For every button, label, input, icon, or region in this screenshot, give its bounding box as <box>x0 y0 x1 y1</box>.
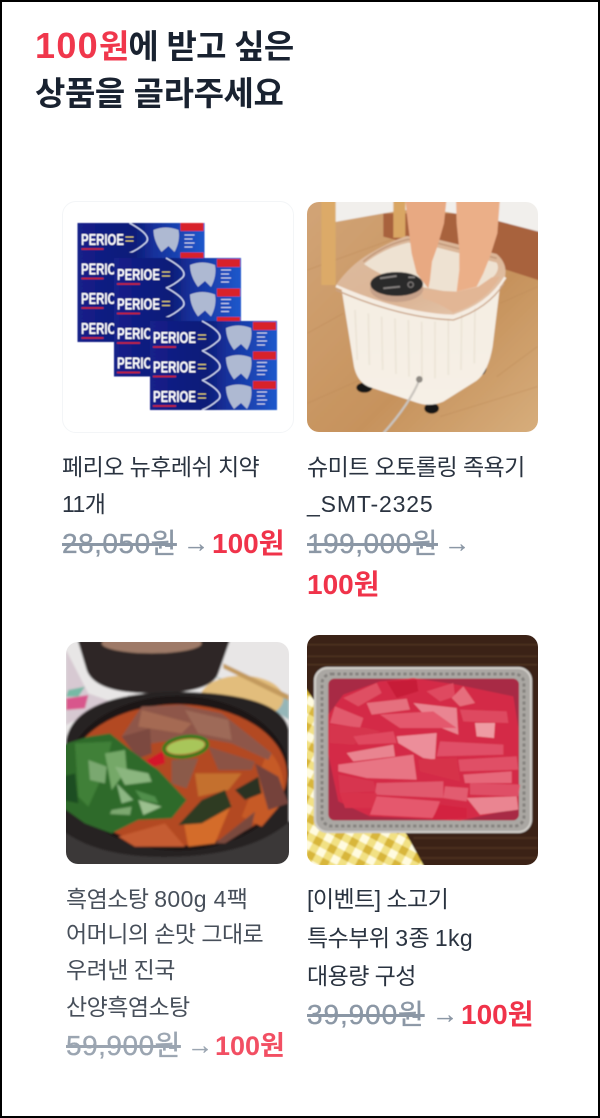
product image: Perioe toothpaste: PERIOE <box>153 360 196 376</box>
product image: Perioe toothpaste: PERIOE <box>117 267 160 284</box>
product image: Perioe toothpaste: PERIOE <box>81 321 124 338</box>
product name second line: 11개 <box>62 491 105 517</box>
price row: 59,900원 <box>66 1030 181 1061</box>
price row <box>66 1030 285 1061</box>
price row <box>307 999 533 1030</box>
product image: beef tray <box>307 635 538 865</box>
product name second line: _SMT-2325 <box>307 491 434 517</box>
product image: beef soup <box>66 642 289 864</box>
product name line 2: 특수부위 3종 1kg <box>307 925 473 951</box>
product image: Perioe toothpaste: PERIOE <box>117 296 160 314</box>
price row: 100원 <box>461 999 533 1030</box>
product name line 4: 산양흑염소탕 <box>66 994 190 1020</box>
old price and arrow: 199,000원 <box>307 528 438 559</box>
panel: foot bath product <box>306 202 538 600</box>
price row: 28,050원 <box>62 528 177 559</box>
price row <box>62 528 284 559</box>
sale price: 100원 <box>307 569 379 600</box>
panel: toothpaste product <box>62 201 294 559</box>
product image: Perioe toothpaste: PERIOE <box>153 330 196 347</box>
old price and arrow: → <box>444 528 470 558</box>
product name: 페리오 뉴후레쉬 치약 <box>62 454 259 480</box>
panel: beef soup product <box>66 642 289 1061</box>
product name line 1: [이벤트] 소고기 <box>307 886 448 912</box>
heading: 상품을 골라주세요 <box>35 75 283 112</box>
product name line 3: 대용량 구성 <box>307 963 416 989</box>
product image: Perioe toothpaste: PERIOE <box>81 232 124 249</box>
panel: beef product <box>307 635 538 1030</box>
product image: Perioe toothpaste: PERIOE <box>117 356 160 372</box>
product name line 1: 흑염소탕 800g 4팩 <box>66 886 247 912</box>
price row: 39,900원 <box>307 999 425 1030</box>
price row: 100원 <box>212 528 284 559</box>
price row: → <box>187 1030 213 1060</box>
price row: → <box>183 528 209 558</box>
product name line 3: 우려낸 진국 <box>66 957 175 983</box>
product image: Perioe toothpaste <box>62 201 294 433</box>
product image: Perioe toothpaste: PERIOE <box>81 291 124 308</box>
product image: Perioe toothpaste: PERIOE <box>81 262 124 278</box>
product image: Perioe toothpaste: PERIOE <box>117 326 160 343</box>
product image: Perioe toothpaste: PERIOE <box>153 389 196 406</box>
heading <box>35 25 294 112</box>
price row: → <box>432 999 458 1029</box>
heading: 100원에 받고 싶은 <box>35 25 294 66</box>
product name: 슈미트 오토롤링 족욕기 <box>307 454 525 480</box>
product image: foot bath <box>307 202 538 432</box>
price row: 100원 <box>215 1031 285 1061</box>
product name line 2: 어머니의 손맛 그대로 <box>66 921 263 947</box>
